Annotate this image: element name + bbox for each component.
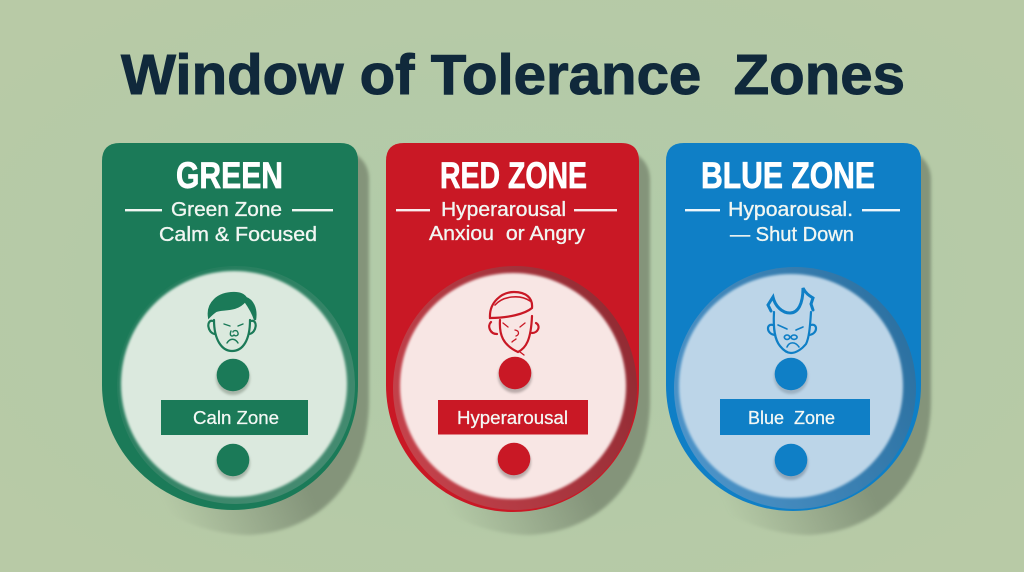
dot: green top [216, 359, 250, 395]
icon: green face [208, 293, 256, 351]
subtitle: Calm & Focused: Calm & Focused [159, 223, 317, 246]
label bar: Blue Zone [720, 399, 870, 435]
panel: blue zone [666, 143, 931, 535]
heading: GREEN: GREEN [176, 155, 283, 196]
inner circle: green [117, 266, 355, 504]
panel shadow: red [410, 148, 650, 535]
label bar: Hyperarousal [438, 400, 588, 434]
title: Window of Tolerance Zones [121, 43, 905, 107]
dot: blue top [774, 358, 808, 394]
panel body: green [102, 143, 358, 510]
inner circle: red [393, 266, 637, 510]
heading: BLUE ZONE: BLUE ZONE [701, 155, 875, 196]
label bar: Blue Zone: Blue Zone [748, 408, 835, 428]
subtitle: Green Zone: Green Zone [171, 198, 282, 221]
heading: RED ZONE: RED ZONE [440, 155, 587, 196]
dot: red bottom [497, 443, 531, 479]
subtitle: Hypoarousal.: Hypoarousal. [728, 198, 853, 221]
dot: blue bottom [774, 444, 808, 480]
dot: green bottom [216, 444, 250, 480]
panel: red zone [386, 143, 650, 535]
panel: green zone [102, 143, 369, 535]
dot: red top [498, 357, 532, 393]
subtitle: Hyperarousal: Hyperarousal [441, 198, 566, 221]
panel shadow: blue [690, 148, 931, 535]
label bar: Caln Zone: Caln Zone [193, 408, 279, 428]
panel body: blue [666, 143, 921, 511]
subtitle: Shut Down: — Shut Down [730, 223, 854, 246]
inner circle: blue [674, 267, 916, 509]
panel body: red [386, 143, 639, 512]
subtitle: Anxiou or Angry: Anxiou or Angry [429, 222, 586, 245]
label bar: Caln Zone [161, 400, 308, 435]
icon: blue face [768, 288, 816, 353]
label bar: Hyperarousal: Hyperarousal [457, 408, 568, 428]
panel shadow: green [130, 148, 369, 535]
icon: red face [489, 292, 539, 355]
